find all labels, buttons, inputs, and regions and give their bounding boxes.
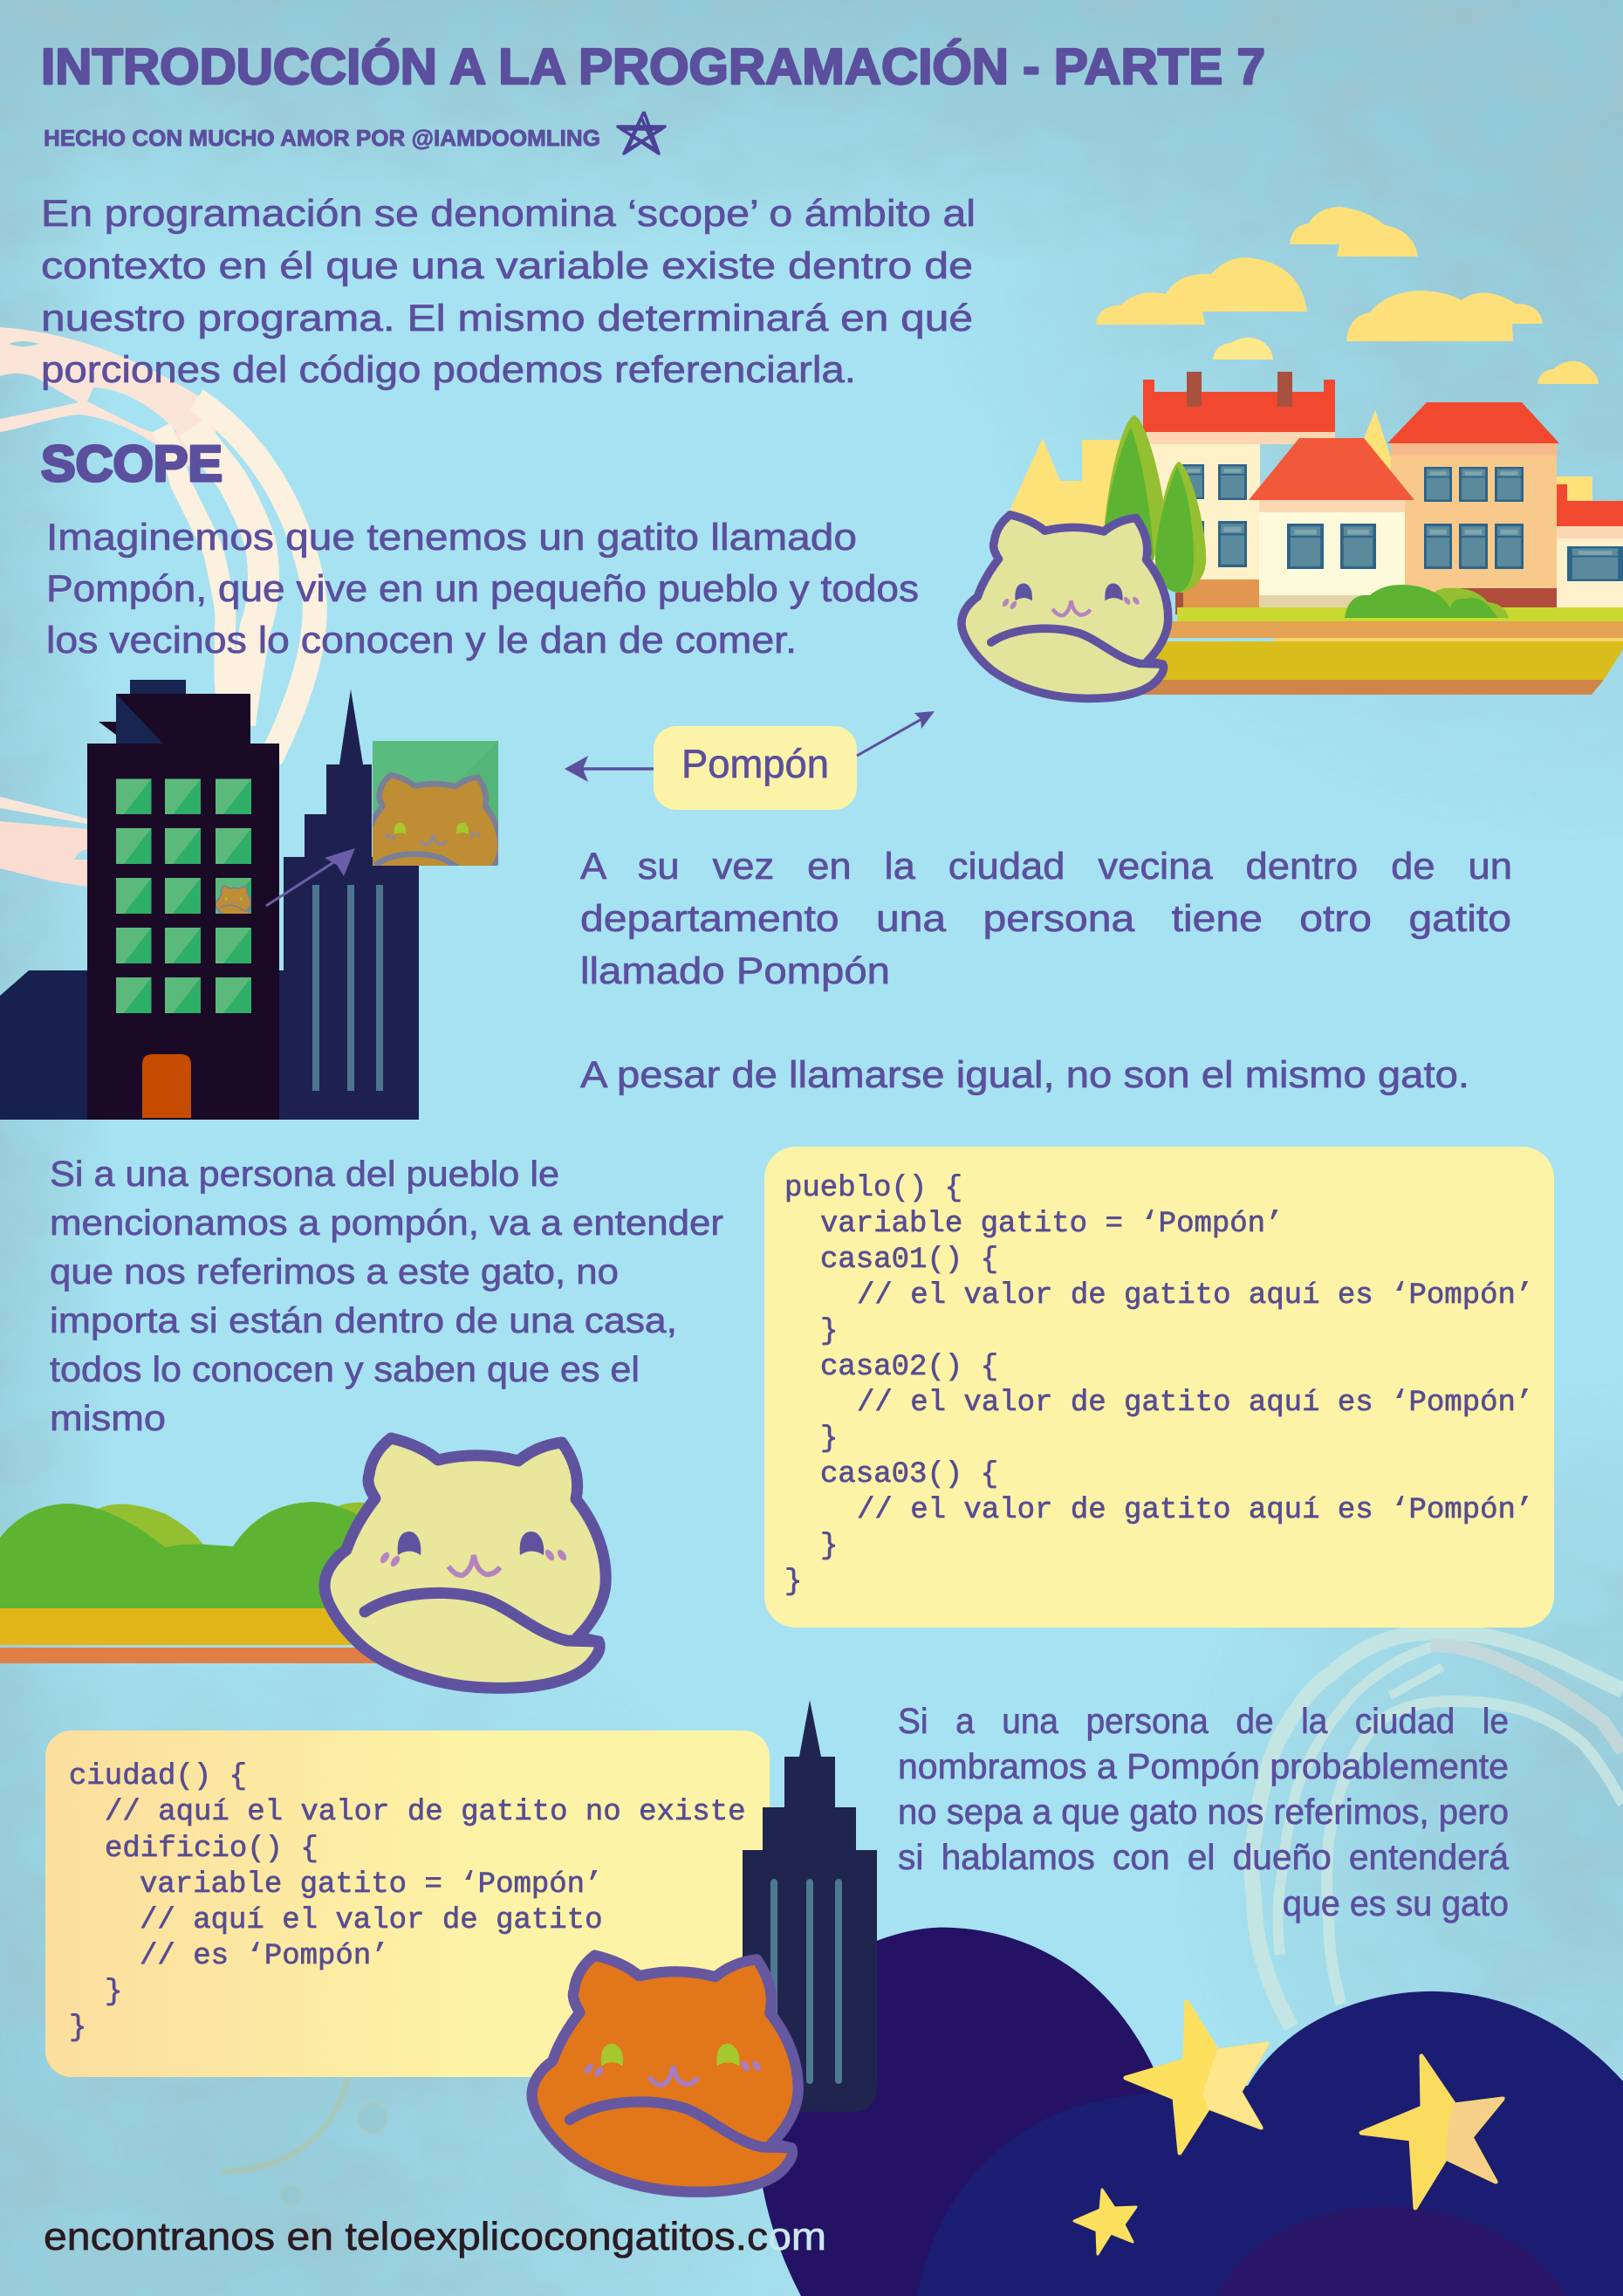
house middle [1249, 438, 1414, 607]
text block: Pompón in the town [46, 517, 919, 661]
code panel: ciudad: } [105, 1976, 122, 2009]
illustration: skyscraper [743, 1700, 877, 2112]
text block: city explanation [898, 1701, 1509, 1923]
illustration: town [1003, 372, 1623, 695]
text block: town explanation: mencionamos a pompón, va a entender [50, 1203, 723, 1243]
code panel: ciudad: // es ‘Pompón’ [140, 1940, 389, 1973]
low building [0, 970, 87, 1120]
text block: city explanation: que es su gato [1283, 1883, 1509, 1923]
text block: town explanation: que nos referimos a este gato, no [50, 1251, 619, 1292]
illustration: night hills [757, 1928, 1623, 2296]
icon: hand-drawn star [618, 112, 665, 154]
house right [1387, 402, 1559, 607]
code panel: ciudad: } [69, 2012, 86, 2045]
ground layers [1138, 607, 1623, 695]
code panel: ciudad: variable gatito = ‘Pompón’ [140, 1868, 602, 1902]
code panel: ciudad: // aquí el valor de gatito no existe [105, 1796, 746, 1829]
decorative coffee ring [222, 1933, 387, 2205]
text block: scope definition: porciones del código podemos referenciarla. [41, 349, 856, 391]
title: INTRODUCCIÓN A LA PROGRAMACIÓN - PARTE 7 [41, 38, 1265, 95]
text block: city explanation: si hablamos con el dueño entenderá [898, 1837, 1509, 1877]
text block: scope definition: nuestro programa. El mismo determinará en qué [41, 298, 973, 339]
text block: the city cat: A su vez en la ciudad vecina dentro de un [580, 846, 1512, 888]
code panel: pueblo: casa03() { [820, 1458, 998, 1491]
code panel: ciudad: edificio() { [105, 1833, 318, 1866]
text block: scope definition: En programación se denomina ‘scope’ o ámbito al [41, 193, 976, 235]
code panel: ciudad [45, 1731, 770, 2077]
text block: the city cat [580, 846, 1512, 1096]
code panel: pueblo: } [820, 1530, 838, 1563]
text block: Pompón in the town: Imaginemos que tenemos un gatito llamado [46, 517, 857, 559]
text block: city explanation: nombramos a Pompón probablemente [898, 1746, 1509, 1786]
bush [1345, 585, 1509, 618]
subtitle: HECHO CON MUCHO AMOR POR @IAMDOOMLING [44, 125, 600, 151]
text block: town explanation [50, 1154, 723, 1438]
heading: scope: SCOPE [41, 435, 223, 492]
distant yellow towers [1003, 410, 1592, 593]
code panel: pueblo: // el valor de gatito aquí es ‘Pompón’ [857, 1279, 1533, 1312]
code panel: pueblo: } [820, 1315, 838, 1348]
house with chimneys [1143, 372, 1335, 607]
text block: city explanation: Si a una persona de la ciudad le [898, 1701, 1509, 1741]
text block: town explanation: mismo [50, 1398, 166, 1438]
icon: orange city cat [532, 1956, 798, 2192]
text block: city explanation: no sepa a que gato nos referimos, pero [898, 1792, 1509, 1832]
callout: magnified window with cat [373, 741, 498, 866]
illustration: bushes and ground [0, 1502, 401, 1663]
text block: scope definition: contexto en él que una variable existe dentro de [41, 245, 973, 287]
main building [87, 680, 279, 1120]
trees [1103, 415, 1206, 614]
icon: star small [1074, 2190, 1136, 2254]
code panel: pueblo: } [784, 1566, 802, 1599]
code panel: ciudad: // aquí el valor de gatito [140, 1904, 602, 1937]
house far right [1557, 484, 1623, 607]
illustration: city [0, 680, 419, 1120]
text block: the city cat: llamado Pompón [580, 950, 890, 992]
text block: town explanation: Si a una persona del pueblo le [50, 1154, 559, 1194]
code panel: pueblo: variable gatito = ‘Pompón’ [820, 1208, 1283, 1241]
decorative swirl: bottom right [1251, 1632, 1623, 2027]
code panel: pueblo: pueblo() { [784, 1172, 962, 1205]
decorative swirl: top left [0, 327, 315, 887]
code panel: ciudad: ciudad() { [69, 1760, 247, 1793]
clouds [1096, 207, 1599, 384]
code panel: pueblo: } [820, 1422, 838, 1456]
icon: village cat [962, 515, 1168, 698]
code panel: pueblo [764, 1147, 1554, 1628]
text block: the city cat: A pesar de llamarse igual, no son el mismo gato. [580, 1054, 1469, 1096]
callout: Pompón label with arrows [565, 711, 935, 810]
icon: big town cat [325, 1438, 606, 1688]
text block: scope definition [41, 193, 976, 391]
code panel: pueblo: // el valor de gatito aquí es ‘Pompón’ [857, 1387, 1533, 1420]
icon: tiny cat in window [216, 886, 250, 917]
text block: town explanation: importa si están dentro de una casa, [50, 1300, 677, 1340]
text block: town explanation: todos lo conocen y saben que es el [50, 1349, 640, 1389]
icon: star large right [1361, 2056, 1505, 2208]
tower with stripes [279, 689, 419, 1120]
footer: website: encontranos en teloexplicocongatitos.c om [44, 2214, 826, 2258]
code panel: pueblo: casa02() { [820, 1351, 998, 1384]
code panel: pueblo: casa01() { [820, 1244, 998, 1277]
arrow: window to magnified cat [266, 848, 355, 906]
text block: Pompón in the town: Pompón, que vive en un pequeño pueblo y todos [46, 568, 919, 610]
callout: Pompón label with arrows: Pompón [681, 741, 829, 786]
text block: Pompón in the town: los vecinos lo conocen y le dan de comer. [46, 620, 797, 661]
icon: star large left [1126, 2002, 1270, 2153]
text block: the city cat: departamento una persona tiene otro gatito [580, 898, 1511, 940]
code panel: pueblo: // el valor de gatito aquí es ‘Pompón’ [857, 1494, 1533, 1527]
